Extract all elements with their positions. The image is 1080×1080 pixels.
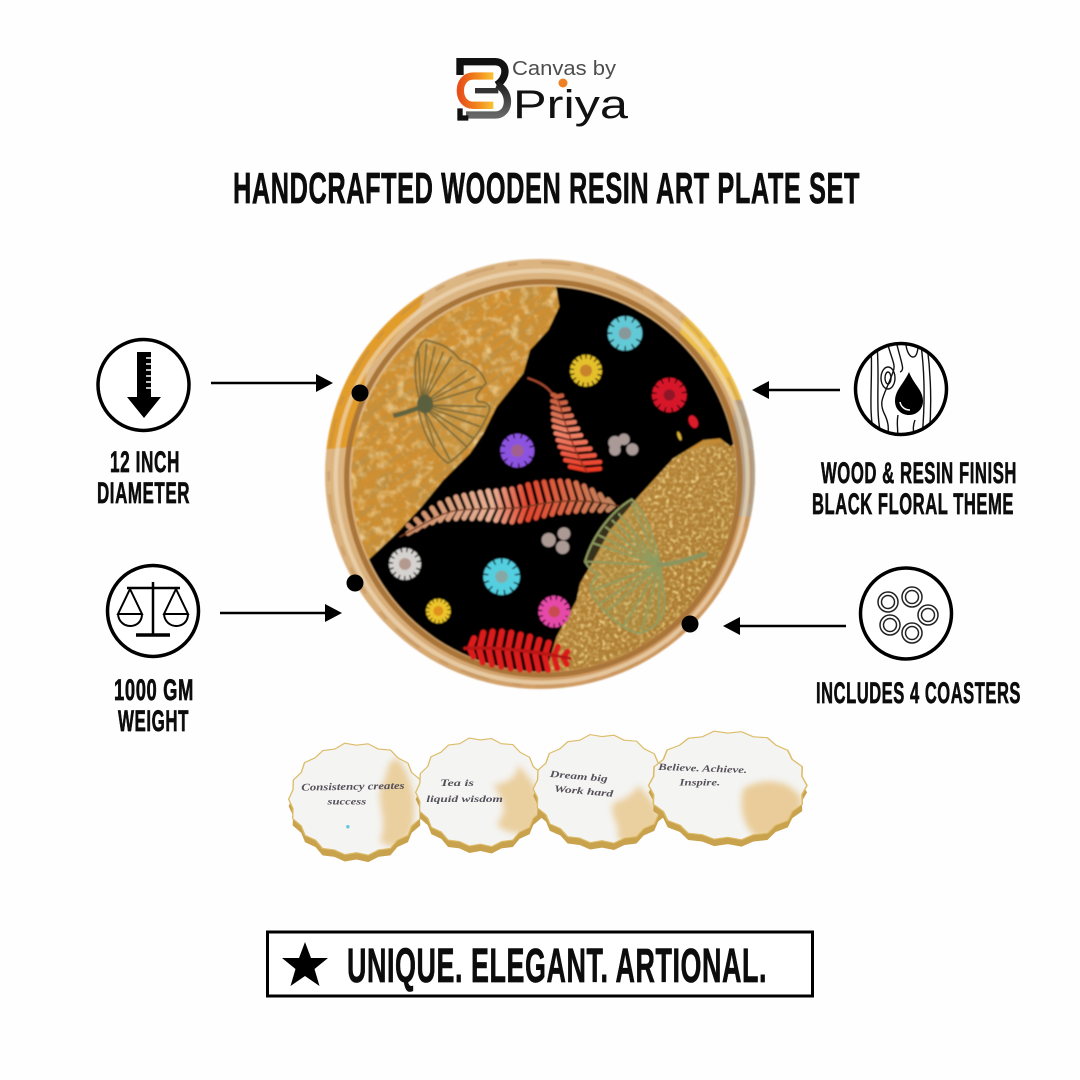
fern, upper center <box>528 378 600 472</box>
flower: cyan lower <box>488 563 515 590</box>
plate resin surface <box>350 286 738 673</box>
coaster one text <box>301 781 405 807</box>
coaster one text: success <box>326 796 366 807</box>
label: wood and resin finish <box>812 457 1017 521</box>
flower: pink <box>542 600 566 624</box>
flower: white <box>393 552 417 576</box>
banner: unique elegant artional <box>268 932 812 996</box>
panel: resin plate photo <box>324 258 756 690</box>
flower: small yellow <box>429 602 447 620</box>
pressed buds, upper <box>608 434 638 456</box>
label: 12 inch diameter: 12 INCH <box>110 446 180 479</box>
logo: Canvas by Priya <box>460 58 629 127</box>
flower: purple <box>505 438 530 463</box>
logo text: Priya: Priya <box>513 83 629 127</box>
gold wood field, upper left <box>343 280 743 680</box>
gold field, lower right <box>550 440 737 672</box>
blue speck <box>346 825 350 828</box>
ginkgo leaf, upper left <box>393 340 490 463</box>
callout dots <box>346 384 698 632</box>
pressed buds, lower <box>542 527 570 554</box>
gold streak texture <box>352 287 732 654</box>
coaster one <box>289 743 424 862</box>
flower: cyan <box>612 321 638 346</box>
label: 1000 gm weight: WEIGHT <box>118 705 189 738</box>
flower: red <box>657 382 682 408</box>
logo text: Canvas by: Canvas by <box>512 58 616 80</box>
coaster three <box>533 735 671 850</box>
icon: diameter arrow with ruler <box>98 340 189 430</box>
arrow: diameter to plate <box>211 374 333 392</box>
coaster two <box>416 738 545 854</box>
icon: four coasters rings <box>860 568 952 659</box>
coaster four <box>649 731 807 847</box>
arrow: finish to plate <box>752 381 840 399</box>
logo accent dot <box>558 78 568 88</box>
red petals <box>676 414 700 441</box>
panel: coaster set photo <box>289 731 807 862</box>
ginkgo leaf, lower right <box>585 499 707 633</box>
label: 12 inch diameter <box>97 446 190 510</box>
coaster one text: Consistency creates <box>301 781 405 794</box>
gold leaf flecks, upper left <box>350 286 643 559</box>
label: 12 inch diameter: DIAMETER <box>97 477 190 510</box>
coaster four text: Believe. Achieve. <box>657 762 747 776</box>
coaster three text: Dream big <box>548 769 608 785</box>
coaster two text <box>426 778 504 805</box>
icon: weighing scale <box>108 566 198 656</box>
flower: yellow <box>574 359 598 383</box>
coaster two text: Tea is <box>440 778 474 789</box>
banner text: UNIQUE. ELEGANT. ARTIONAL. <box>347 940 767 993</box>
coaster four text: Inspire. <box>678 777 720 788</box>
coaster two text: liquid wisdom <box>426 794 504 805</box>
label: 1000 gm weight <box>114 674 194 738</box>
coaster three text: Work hard <box>554 784 614 800</box>
label: 1000 gm weight: 1000 GM <box>114 674 194 707</box>
logo mark <box>460 62 507 118</box>
coaster three text <box>548 769 614 800</box>
icon: wood grain with resin drop <box>856 344 946 438</box>
arrow: coasters to plate <box>723 617 846 635</box>
icon: star <box>282 942 328 986</box>
arrow: weight to plate <box>220 604 342 622</box>
gold leaf flecks, lower right <box>549 441 737 671</box>
plate wooden rim <box>320 259 757 689</box>
fern, bottom red <box>465 632 570 670</box>
coaster four text <box>657 762 747 788</box>
fern, center <box>400 481 620 537</box>
black resin region <box>360 280 743 680</box>
